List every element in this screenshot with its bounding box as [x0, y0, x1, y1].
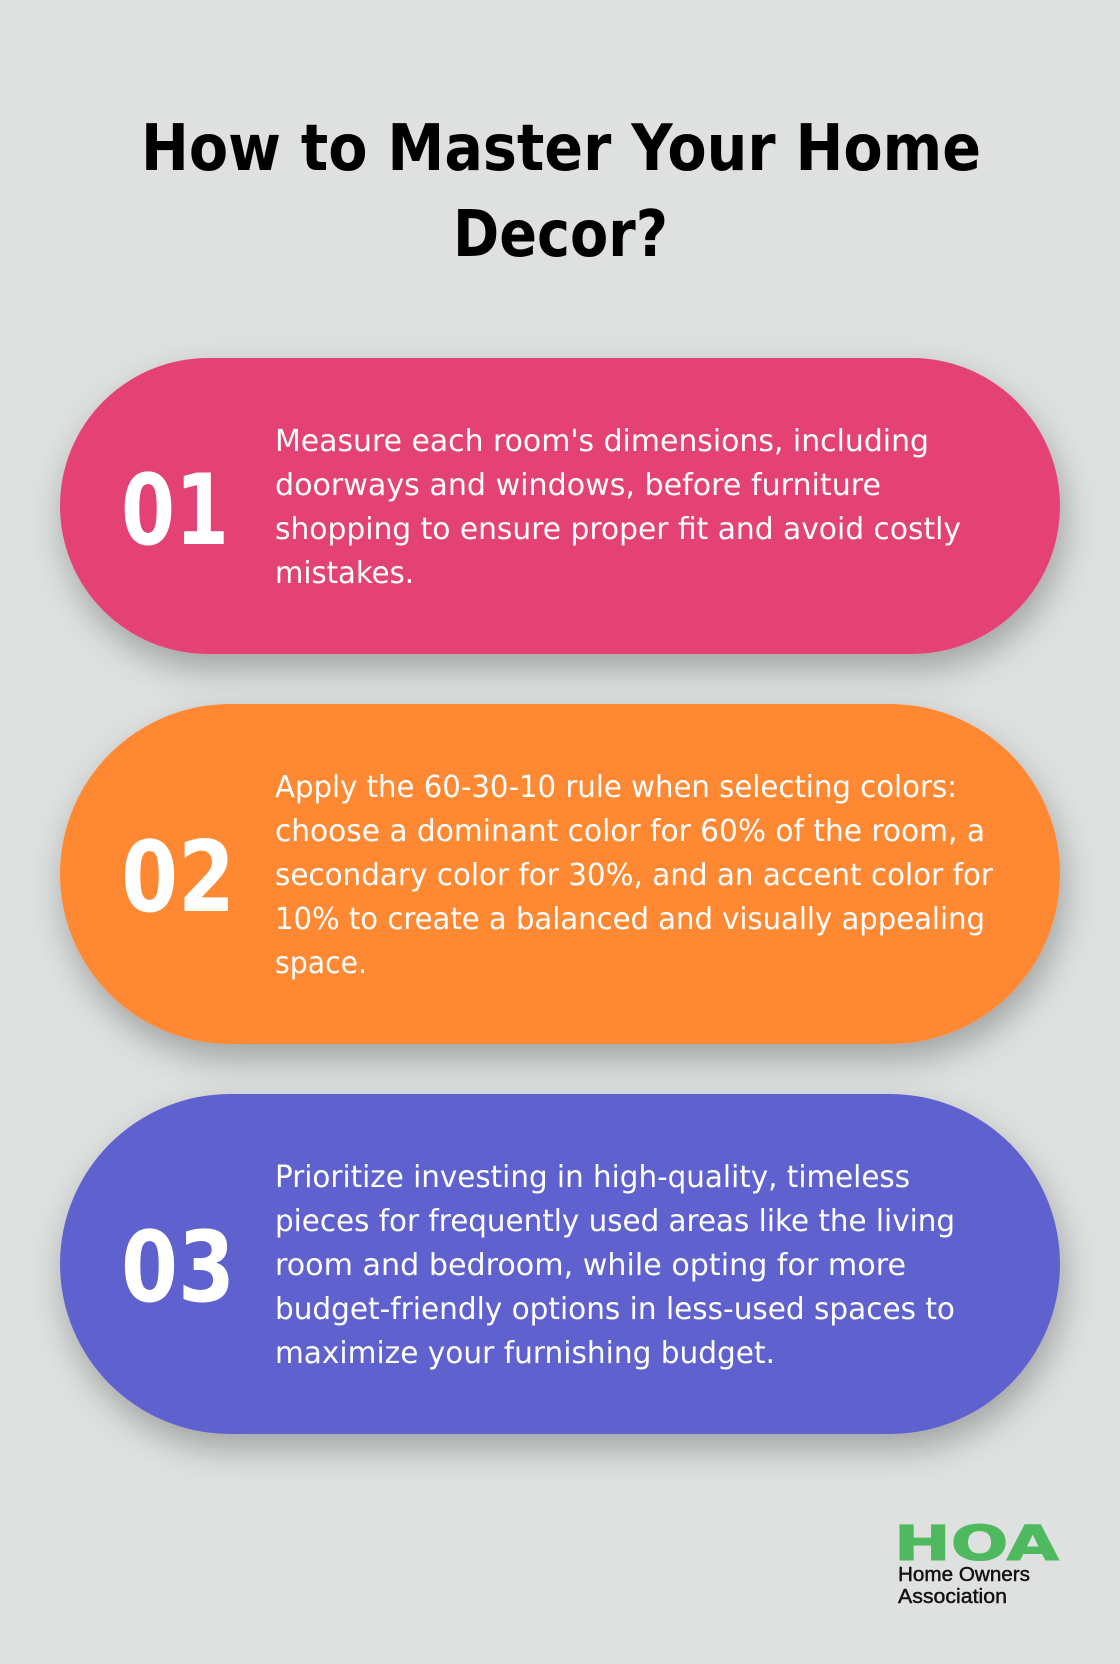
logo: Home Owners Association: Home Owners [898, 1564, 1030, 1586]
text block: step 01: doorways and windows, before furniture [275, 468, 881, 503]
logo: Home Owners Association: HOA [894, 1516, 1059, 1572]
panel: step 03 [60, 1094, 1060, 1434]
text block: step 01: shopping to ensure proper fit and avoid costly [275, 512, 961, 547]
text block: step 02: 10% to create a balanced and visually appealing [275, 902, 985, 937]
text block: step 02: secondary color for 30%, and an accent color for [275, 858, 994, 893]
text block: step 02: Apply the 60-30-10 rule when selecting colors: [275, 770, 957, 805]
logo: Home Owners Association [894, 1516, 1059, 1608]
text block: step 03: budget-friendly options in less-used spaces to [275, 1292, 955, 1327]
text block: step 03: Prioritize investing in high-quality, timeless [275, 1160, 910, 1195]
text block: step 03: room and bedroom, while opting for more [275, 1248, 906, 1283]
number: 03: 03 [121, 1211, 235, 1325]
pill: step 02 background [60, 704, 1060, 1044]
text block: step 02: choose a dominant color for 60% of the room, a [275, 814, 985, 849]
text block: step 03: maximize your furnishing budget. [275, 1336, 775, 1371]
title [141, 112, 981, 272]
text block: step 02: space. [275, 946, 367, 981]
text block: step 03 [275, 1160, 955, 1371]
logo: Home Owners Association: Association [898, 1586, 1007, 1608]
pill: step 01 background [60, 358, 1060, 654]
text block: step 02 [275, 770, 994, 981]
title: Decor? [453, 198, 668, 272]
panel: step 02 [60, 704, 1060, 1044]
text block: step 01: Measure each room's dimensions, including [275, 424, 929, 459]
title: How to Master Your Home [141, 112, 981, 186]
text block: step 03: pieces for frequently used areas like the living [275, 1204, 955, 1239]
panel: step 01 [60, 358, 1060, 654]
pill: step 03 background [60, 1094, 1060, 1434]
number: 01: 01 [121, 454, 229, 568]
number: 02: 02 [121, 821, 235, 935]
text block: step 01 [275, 424, 961, 591]
text block: step 01: mistakes. [275, 556, 414, 591]
